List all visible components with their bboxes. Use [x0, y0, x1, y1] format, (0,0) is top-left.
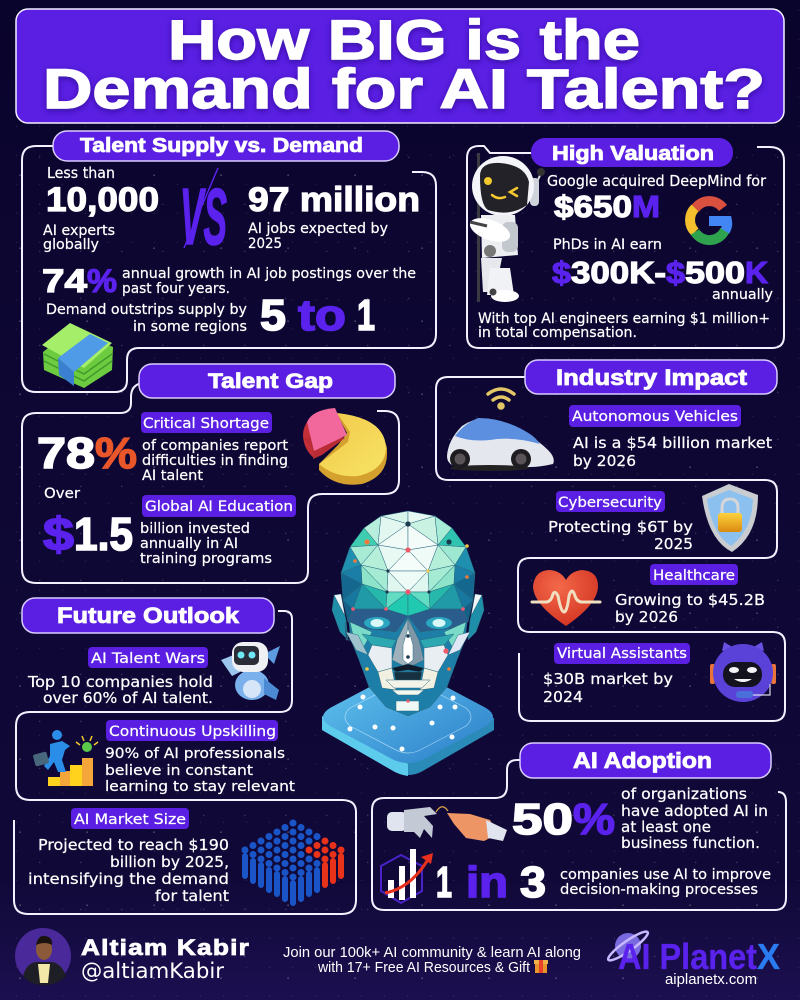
icon: security shield — [702, 484, 758, 552]
panel: talent supply vs demand — [22, 131, 436, 392]
stat: 78% — [37, 429, 137, 478]
panel: talent gap — [22, 364, 399, 583]
stat: salary range: 300K- — [571, 255, 666, 290]
stat: $650M: M — [632, 189, 660, 224]
stat: $1.5: 1.5 — [74, 508, 133, 560]
stat: salary range: $ — [552, 255, 571, 290]
panel: high valuation — [467, 138, 784, 348]
panel: future outlook — [14, 598, 356, 914]
stat: $1.5: $ — [43, 508, 74, 560]
panel: future outlook: Future Outlook — [57, 603, 240, 628]
panel: future outlook: believe in constant — [105, 763, 253, 779]
logo wordmark: X — [757, 936, 780, 977]
tag: AI market size: AI Market Size — [74, 812, 186, 828]
stat: 5 to 1 — [260, 291, 375, 340]
icon: autonomous car — [447, 418, 554, 471]
panel: AI adoption: companies use AI to improve — [560, 867, 771, 883]
icon: google G — [690, 201, 727, 240]
panel: talent supply vs demand: VS — [180, 172, 227, 261]
panel: industry impact: AI is a $54 billion market — [573, 434, 772, 452]
title text: Demand for AI Talent? — [43, 57, 765, 120]
stat: 5 to 1: 1 — [357, 291, 375, 340]
panel: talent supply vs demand: globally — [43, 237, 99, 253]
panel: talent gap: Talent Gap — [208, 370, 333, 393]
panel: AI adoption: have adopted AI in — [621, 802, 768, 820]
icon: cash stack — [42, 323, 113, 388]
panel: high valuation: High Valuation — [552, 143, 714, 165]
icon: heart with pulse — [532, 570, 600, 626]
tag: global AI education: Global AI Education — [145, 499, 293, 515]
panel: high valuation: PhDs in AI earn — [553, 237, 662, 253]
footer: with 17+ Free AI Resources & Gift — [317, 959, 531, 976]
mesh nodes — [351, 521, 469, 703]
tag: critical shortage: Critical Shortage — [143, 416, 269, 432]
logo wordmark: AI Planet — [618, 936, 757, 977]
panel: talent gap: of companies report — [142, 438, 288, 454]
panel: high valuation: in total compensation. — [478, 325, 637, 341]
panel: AI adoption: decision-making processes — [560, 882, 758, 898]
stat: 74%: 74 — [42, 263, 87, 299]
tag: virtual assistants — [554, 643, 690, 664]
panel: talent gap: annually in AI — [140, 536, 238, 552]
panel: future outlook: Top 10 companies hold — [27, 673, 213, 691]
title text: How BIG is the — [168, 8, 640, 71]
tag: AI talent wars: AI Talent Wars — [91, 651, 205, 667]
panel: industry impact: 2025 — [654, 535, 693, 553]
title text — [43, 8, 765, 120]
panel: AI adoption: AI Adoption — [573, 748, 712, 773]
head mesh — [332, 511, 484, 716]
illustration: polygon AI head on platform — [322, 511, 494, 776]
panel: future outlook: for talent — [155, 887, 229, 905]
panel: AI adoption: at least one — [621, 818, 711, 836]
panel: future outlook: learning to stay relevant — [105, 779, 295, 795]
icon: small robot — [221, 642, 280, 700]
stat: salary range: K — [745, 255, 769, 290]
panel: talent gap: difficulties in finding — [142, 453, 288, 469]
panel: future outlook: Projected to reach $190 — [38, 836, 229, 854]
stat: $650M — [554, 189, 660, 224]
icon: assistant bot — [710, 642, 776, 702]
panel: talent supply vs demand: in some regions — [133, 319, 247, 335]
panel: future outlook: 90% of AI professionals — [105, 746, 285, 762]
panel: high valuation: With top AI engineers earning $1 million+ — [478, 311, 770, 327]
footer — [15, 928, 780, 988]
platform — [322, 671, 494, 776]
stat: 1 in 3 — [436, 858, 546, 907]
stat: 5 to 1: to — [298, 291, 346, 340]
stat: salary range: 500 — [685, 255, 745, 290]
eyes — [364, 617, 452, 629]
tag: critical shortage — [141, 412, 272, 433]
panel: high valuation: Google acquired DeepMind for — [547, 172, 767, 190]
icon: pie chart — [303, 408, 387, 485]
panel: industry impact: Protecting $6T by — [548, 518, 693, 536]
stat: 74% — [42, 263, 117, 299]
VS emblem — [180, 168, 227, 261]
tag: global AI education — [142, 495, 296, 517]
panel: future outlook: intensifying the demand — [28, 870, 229, 888]
stat: salary range: $ — [666, 255, 685, 290]
panel: talent supply vs demand: AI jobs expected by — [248, 221, 388, 237]
icon: career stairs — [33, 730, 98, 786]
panel: future outlook: over 60% of AI talent. — [43, 689, 213, 707]
tag: autonomous vehicles — [569, 405, 741, 427]
icon: crowd of people — [245, 823, 341, 903]
panel: industry impact: Growing to $45.2B — [615, 591, 765, 609]
author photo — [15, 928, 71, 985]
panel: industry impact: 2024 — [543, 688, 583, 706]
tag: continuous upskilling — [106, 720, 278, 741]
panel: industry impact: by 2026 — [573, 452, 636, 470]
panel: AI adoption: of organizations — [621, 785, 747, 803]
panel: talent gap: training programs — [140, 551, 272, 567]
stat: 50% — [512, 795, 615, 844]
panel: high valuation: annually — [712, 287, 773, 303]
stat: $650M: $650 — [554, 189, 632, 224]
tag: cybersecurity — [556, 491, 665, 512]
panel: talent supply vs demand: past four years. — [122, 281, 230, 297]
stat: 78%: % — [95, 429, 137, 478]
tag: continuous upskilling: Continuous Upskilling — [109, 724, 276, 740]
panel: industry impact: Industry Impact — [556, 365, 748, 390]
tag: autonomous vehicles: Autonomous Vehicles — [572, 409, 738, 425]
stat: 1 in 3: 3 — [520, 858, 546, 907]
panel: industry impact — [436, 360, 785, 721]
icon: growth chart — [381, 849, 433, 903]
stat: salary range — [552, 255, 769, 290]
panel: talent gap: AI talent — [142, 468, 203, 484]
tag: AI market size — [71, 808, 189, 829]
panel: talent supply vs demand: 10,000 — [46, 181, 159, 219]
stat: 50%: % — [573, 795, 615, 844]
stat: 5 to 1: 5 — [260, 291, 286, 340]
stat: 1 in 3: in — [466, 858, 508, 907]
stat: 74%: % — [87, 263, 117, 299]
stat: 1 in 3: 1 — [436, 858, 452, 907]
footer: @altiamKabir — [81, 959, 224, 983]
icon: planet logo — [605, 928, 651, 964]
stat: 50%: 50 — [512, 795, 573, 844]
tag: healthcare — [650, 564, 738, 585]
panel: talent gap: billion invested — [140, 521, 250, 537]
panel: talent supply vs demand: Less than — [47, 164, 115, 182]
panel: AI adoption: business function. — [621, 834, 760, 852]
panel: industry impact: by 2026 — [615, 608, 678, 626]
icon: gift — [534, 960, 548, 973]
icon: robot and human hands — [387, 807, 507, 841]
tag: healthcare: Healthcare — [653, 568, 735, 584]
panel: AI adoption — [372, 743, 786, 910]
stat: 78%: 78 — [37, 429, 95, 478]
footer: aiplanetx.com — [665, 971, 757, 988]
panel: talent supply vs demand: AI experts — [43, 223, 115, 239]
panel: talent supply vs demand: 97 million — [248, 181, 420, 219]
icon: wifi signal — [488, 389, 514, 408]
panel: talent gap: Over — [44, 486, 80, 502]
tag: virtual assistants: Virtual Assistants — [557, 646, 687, 662]
panel: future outlook: billion by 2025, — [110, 853, 229, 871]
footer: Altiam Kabir — [81, 935, 250, 960]
footer: Join our 100k+ AI community & learn AI along — [283, 944, 581, 961]
stat: $1.5 — [43, 508, 133, 560]
panel: talent supply vs demand: Talent Supply vs. Demand — [80, 135, 363, 157]
tag: AI talent wars — [88, 647, 208, 668]
tag: cybersecurity: Cybersecurity — [558, 495, 662, 511]
panel: talent supply vs demand: annual growth in AI job postings over the — [122, 266, 416, 282]
title banner — [16, 8, 784, 123]
icon: robot astronaut — [467, 153, 545, 302]
panel: talent supply vs demand: Demand outstrips supply by — [46, 302, 247, 318]
panel: talent supply vs demand: 2025 — [248, 236, 282, 252]
panel: industry impact: $30B market by — [543, 670, 673, 688]
